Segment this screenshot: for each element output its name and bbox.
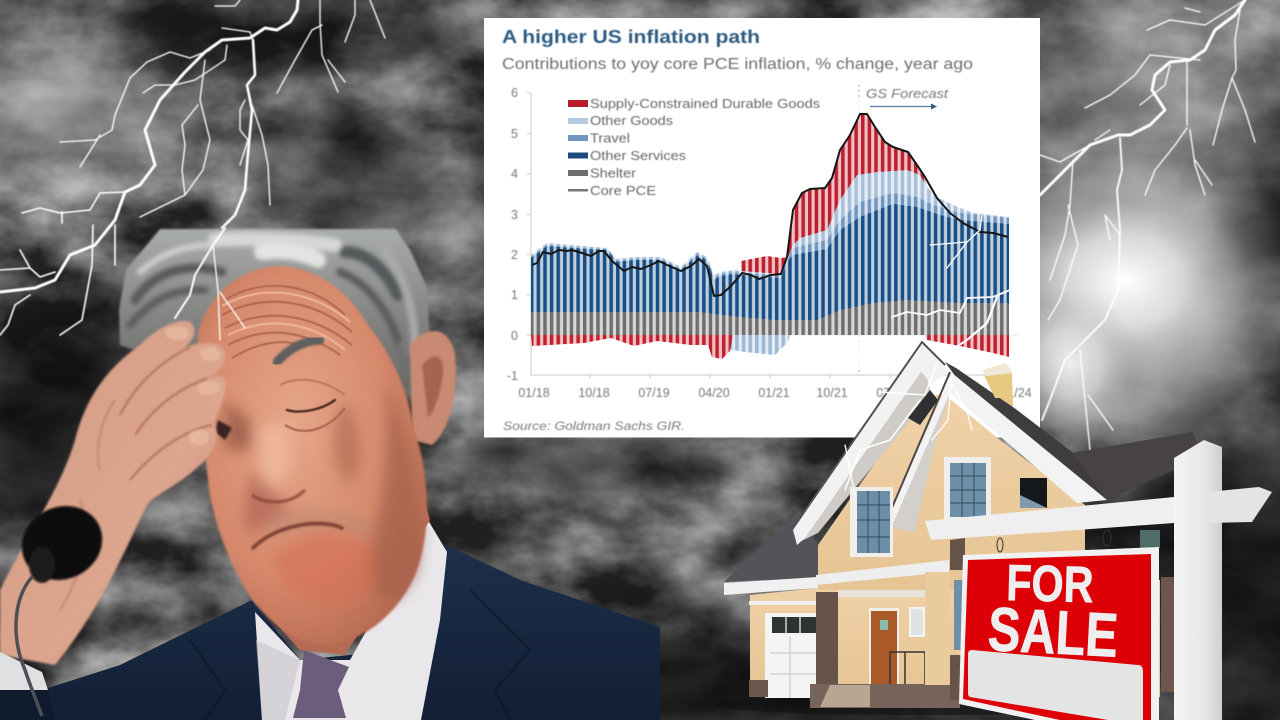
ground shadow: [715, 695, 1145, 715]
closed eye: [280, 380, 345, 431]
face shading: [225, 380, 420, 604]
x axis labels: 10/21: [816, 386, 848, 400]
series: other goods: [531, 170, 1009, 335]
lower walls: [750, 580, 1160, 697]
dark gable edge: [793, 342, 945, 528]
y axis labels: 6: [511, 86, 518, 100]
x axis labels: 07/19: [638, 386, 670, 400]
x axis labels: 01/18: [518, 386, 550, 400]
stacked bar chart: [530, 100, 1012, 370]
porch railing: [890, 652, 925, 684]
series: other services: [531, 204, 1009, 335]
front door: [869, 608, 899, 684]
porch base bricks: [749, 680, 768, 697]
forecast arrow: [870, 104, 937, 110]
tie: [293, 650, 349, 718]
upper left window: [850, 487, 893, 557]
suit lapels: [190, 590, 530, 720]
upper centre window: [944, 457, 991, 519]
left eave: [724, 577, 818, 595]
sale text: SALE: [986, 595, 1120, 671]
house: [715, 342, 1197, 715]
left hip roof: [724, 510, 818, 582]
y axis labels: 5: [511, 127, 518, 141]
eyebrow: [277, 340, 320, 362]
bar gaps: [530, 100, 1012, 370]
sign arm end: [1207, 487, 1272, 523]
legend: Other Services: [590, 149, 686, 163]
suit jacket: [42, 545, 660, 720]
porch ceiling trim: [838, 590, 925, 597]
sign post: [1174, 440, 1222, 720]
lightning: top left bolt: [0, 0, 385, 335]
shirt cuff: [0, 652, 48, 690]
y axis labels: [507, 86, 518, 383]
chart subtitle: Contributions to yoy core PCE inflation, % change, year ago: [502, 56, 973, 73]
garage door: [765, 613, 816, 698]
source note: Source: Goldman Sachs GIR.: [503, 419, 685, 433]
microphone: [10, 493, 114, 593]
x axis labels: [518, 386, 1032, 400]
legend: Other Goods: [590, 114, 673, 128]
left eave soffit: [797, 360, 932, 543]
nose and mouth: [252, 490, 342, 548]
dark gable edge right: [891, 372, 950, 510]
series: travel: [531, 193, 1009, 335]
chart title: A higher US inflation path: [502, 26, 760, 47]
porch stairs and base: [810, 684, 960, 708]
legend: Supply-Constrained Durable Goods: [590, 97, 820, 111]
for text: FOR: [1006, 554, 1094, 613]
for sale sign: [925, 440, 1272, 720]
microphone stem: [16, 577, 42, 716]
y axis labels: 3: [511, 208, 518, 222]
zero line: [531, 334, 1018, 336]
neck: [252, 470, 430, 655]
series: supply-constrained durable goods: [741, 114, 927, 335]
ear: [410, 331, 456, 445]
x axis labels: 07/22: [876, 386, 908, 400]
small dark window: [1020, 478, 1047, 508]
series: shelter: [531, 300, 1009, 335]
sign board: [959, 547, 1159, 720]
lightning on house: [845, 363, 972, 495]
upper gable interior shade: [891, 378, 952, 532]
middle trim band: [816, 560, 949, 585]
y axis labels: 1: [511, 288, 518, 302]
steps: [820, 685, 870, 707]
shirt collar: [255, 520, 447, 720]
figure: man with hand on forehead: [0, 228, 660, 720]
side bay window and column: [925, 538, 965, 700]
y axis labels: 0: [511, 329, 518, 343]
x axis labels: 01/24: [1000, 386, 1032, 400]
brick pillar: [816, 592, 838, 684]
right brick pier: [1161, 577, 1174, 692]
hair: [119, 229, 430, 400]
dark sleeve corner: [0, 690, 55, 720]
hand and fingers: [0, 321, 226, 665]
x axis labels: 04/20: [698, 386, 730, 400]
collar shadow: [256, 640, 300, 720]
chart axes: [527, 93, 1010, 378]
y axis labels: 2: [511, 248, 518, 262]
legend: Travel: [590, 132, 630, 146]
hair streaks: [130, 239, 415, 380]
x axis labels: 01/21: [758, 386, 790, 400]
left wall trim: [749, 601, 816, 605]
right gable trim: [891, 373, 1107, 528]
rear right roof: [1072, 432, 1197, 500]
inner eye shadow: [215, 420, 232, 440]
core PCE line: [532, 114, 1008, 296]
sign arm: [925, 497, 1174, 540]
sign red face: [963, 554, 1151, 720]
panel: inflation chart: [484, 18, 1040, 438]
x axis labels: 10/18: [578, 386, 610, 400]
legend: Core PCE: [590, 184, 656, 198]
series: negative durable goods late: [925, 335, 1009, 357]
face: [198, 266, 427, 645]
series: negative durable goods early: [531, 335, 733, 359]
right small window: [1140, 530, 1160, 548]
hanging hooks: [997, 530, 1111, 552]
main right roof: [945, 362, 1107, 500]
chimney: [982, 363, 1013, 407]
y axis labels: 4: [511, 167, 518, 181]
upper walls: [818, 395, 1085, 590]
legend: Shelter: [590, 166, 636, 180]
lightning over chart: [892, 215, 1010, 363]
porch side window: [910, 608, 924, 636]
forecast label: GS Forecast: [866, 87, 949, 101]
forehead wrinkles: [222, 286, 352, 358]
forecast divider: [858, 85, 860, 375]
gable vent: [908, 390, 938, 425]
legend: [568, 97, 820, 198]
left gable trim: [793, 342, 949, 545]
lightning: top right bolt: [1040, 0, 1255, 450]
y axis labels: -1: [507, 369, 518, 383]
sign white strip: [968, 650, 1143, 720]
lightning over forehead: [175, 228, 245, 340]
series: negative other goods: [712, 335, 790, 355]
